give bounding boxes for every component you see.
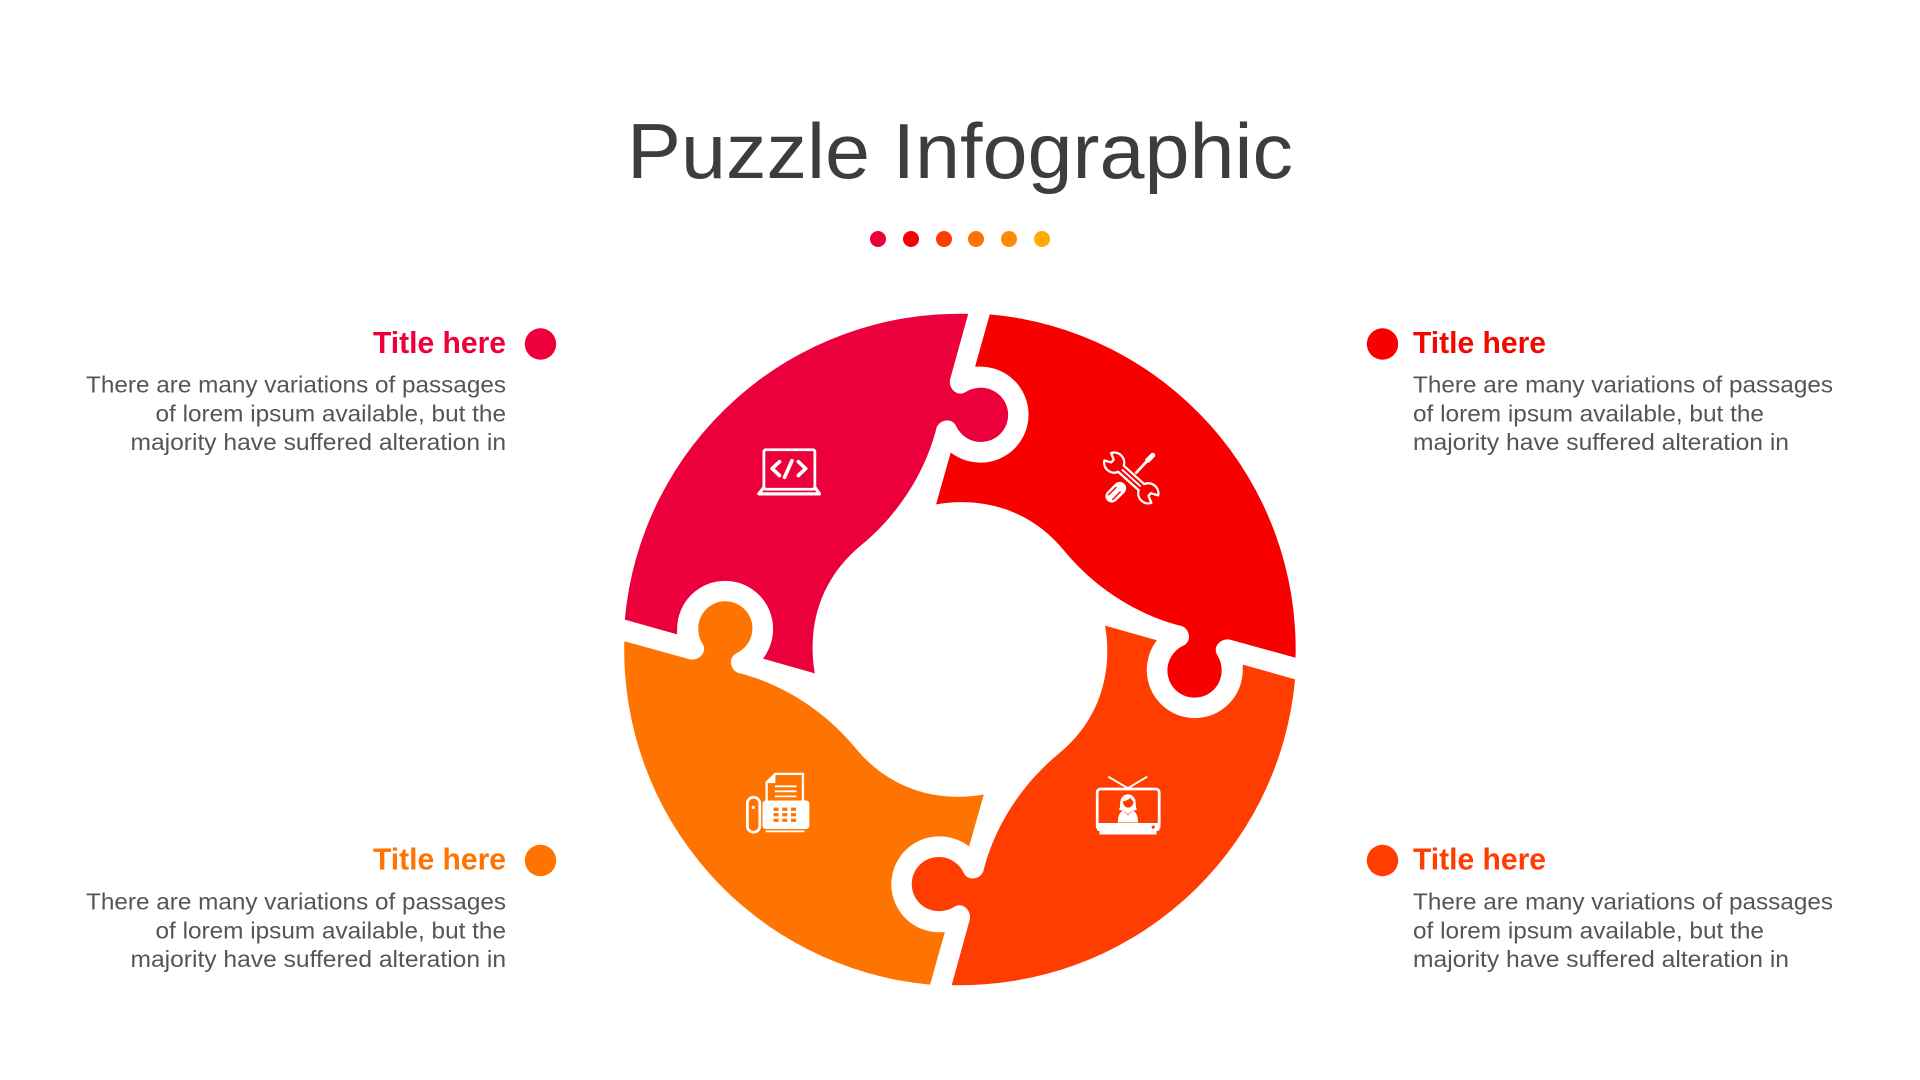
body text [86, 372, 506, 455]
body text: of lorem ipsum available, but the [1413, 400, 1764, 426]
callout: bottom-left [86, 843, 556, 972]
body text: of lorem ipsum available, but the [156, 917, 506, 943]
body text: There are many variations of passages [86, 888, 506, 914]
callout: bottom-right [1367, 843, 1833, 972]
body text: majority have suffered alteration in [1413, 946, 1789, 972]
heading: Title here [373, 843, 506, 877]
body text [86, 888, 506, 972]
icon: wrench and screwdriver [1101, 449, 1162, 507]
marker dot [525, 328, 556, 360]
marker dot [525, 845, 556, 876]
puzzle piece: red top-right [936, 314, 1296, 698]
callout: top-left [86, 326, 556, 455]
puzzle piece: crimson top-left [625, 314, 1008, 673]
heading: Title here [373, 326, 506, 360]
body text [1413, 888, 1833, 972]
icon: fax machine [747, 774, 809, 832]
title: Puzzle Infographic [627, 107, 1293, 195]
body text: of lorem ipsum available, but the [1413, 917, 1764, 943]
body text: There are many variations of passages [1413, 888, 1833, 914]
heading: Title here [1413, 326, 1546, 360]
icon: laptop with code [759, 450, 819, 494]
callout: top-right [1367, 326, 1833, 455]
icon: television with presenter [1097, 777, 1159, 834]
body text: of lorem ipsum available, but the [156, 400, 506, 426]
puzzle piece: orange bottom-left [624, 601, 984, 985]
body text: majority have suffered alteration in [130, 429, 506, 455]
marker dot [1367, 328, 1398, 360]
puzzle piece: orange-red bottom-right [912, 626, 1295, 985]
decorative colored dots row [870, 231, 1050, 247]
marker dot [1367, 845, 1398, 876]
body text: There are many variations of passages [1413, 372, 1833, 398]
body text: majority have suffered alteration in [130, 946, 506, 972]
body text [1413, 372, 1833, 455]
body text: There are many variations of passages [86, 372, 506, 398]
heading: Title here [1413, 843, 1546, 877]
puzzle ring chart [624, 314, 1296, 985]
body text: majority have suffered alteration in [1413, 429, 1789, 455]
